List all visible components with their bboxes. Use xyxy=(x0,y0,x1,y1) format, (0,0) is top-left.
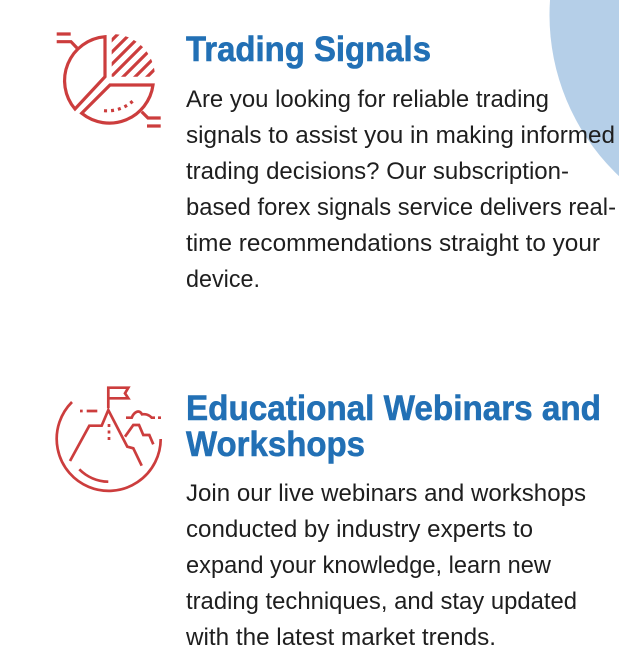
text block: webinars description: Join our live webinars and workshops xyxy=(186,480,586,507)
text block: trading signals description: trading decisions? Our subscription- xyxy=(186,158,569,185)
heading: educational webinars and workshops: Workshops xyxy=(186,424,365,464)
text block: webinars description xyxy=(185,480,586,648)
text block: trading signals description xyxy=(186,86,616,293)
text block: trading signals description: signals to assist you in making informed xyxy=(186,122,615,149)
text block: webinars description: expand your knowledge, learn new xyxy=(186,552,552,579)
heading: trading signals: Trading Signals xyxy=(186,29,431,69)
section: trading signals xyxy=(57,27,616,293)
text block: trading signals description: device. xyxy=(186,266,260,293)
section: educational webinars and workshops xyxy=(57,388,601,648)
text block: trading signals description: Are you looking for reliable trading xyxy=(186,86,549,113)
text block: trading signals description: based forex signals service delivers real- xyxy=(186,194,616,221)
heading: educational webinars and workshops: Educational Webinars and xyxy=(186,388,601,428)
decorative blue circle xyxy=(550,0,619,236)
text block: trading signals description: time recommendations straight to your xyxy=(186,230,600,257)
text block: webinars description: conducted by industry experts to xyxy=(186,516,533,543)
heading: educational webinars and workshops xyxy=(186,388,601,464)
icon: pie chart xyxy=(56,32,161,128)
icon: mountain with flag xyxy=(57,388,161,491)
text block: webinars description: trading techniques, and stay updated xyxy=(186,588,577,615)
